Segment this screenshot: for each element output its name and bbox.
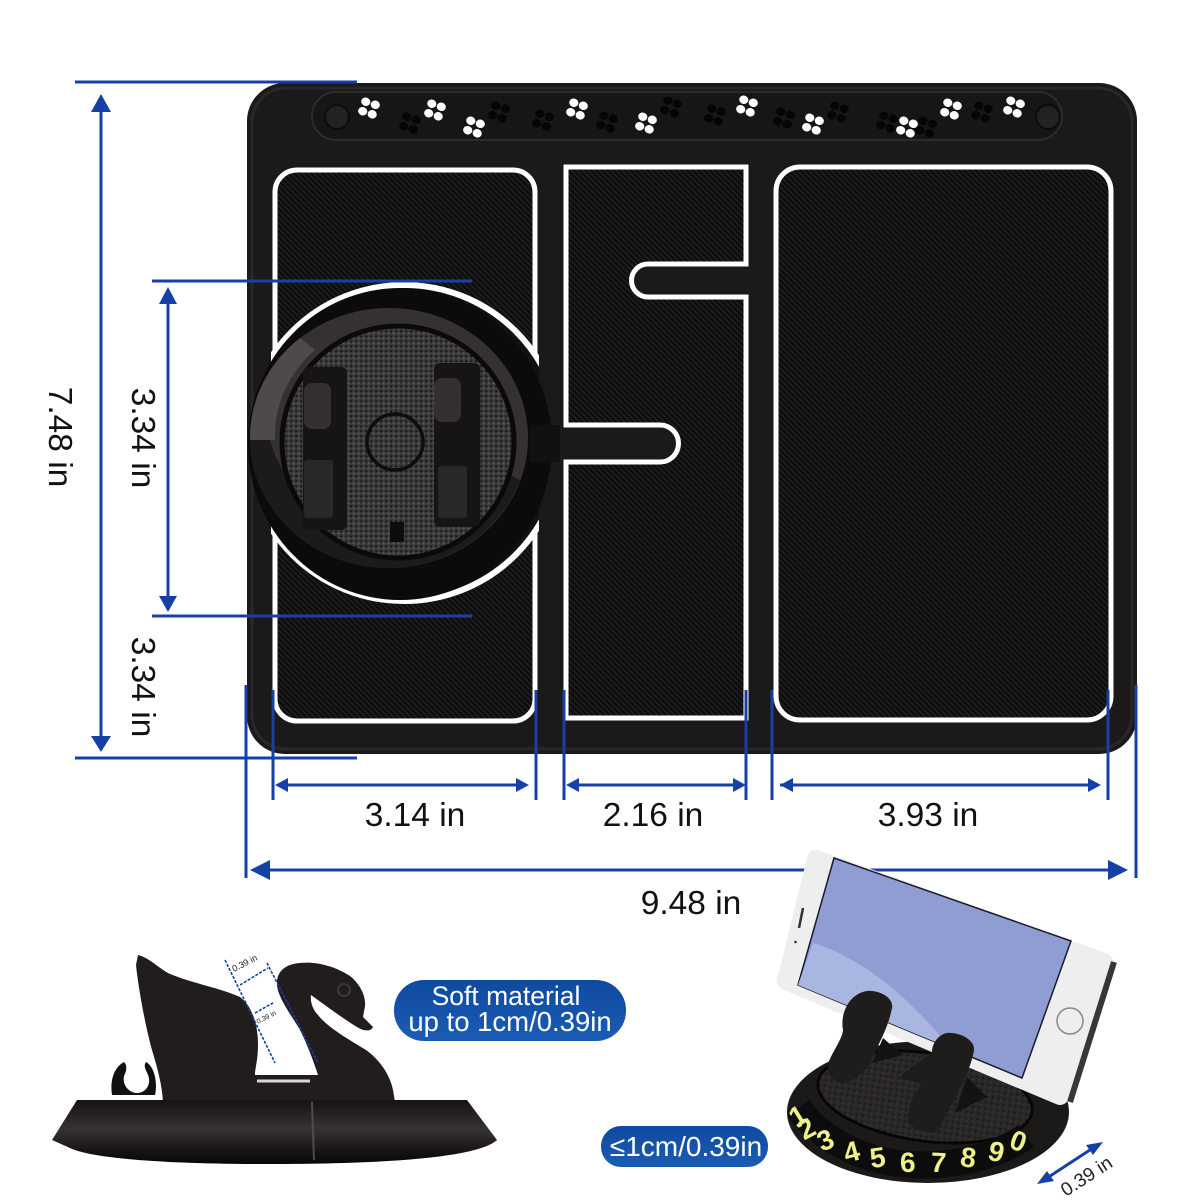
digits: 5 xyxy=(868,1141,888,1174)
callout: soft material: up to 1cm/0.39in xyxy=(408,1006,612,1037)
label: 3.93 in: 3.93 in xyxy=(878,797,978,834)
callout: soft material: Soft material xyxy=(432,981,580,1011)
number plate stand xyxy=(783,991,1031,1178)
phone edge xyxy=(1070,962,1114,1102)
digits: 1 xyxy=(783,1099,813,1133)
dimension marks on swan xyxy=(225,960,318,1063)
digits: 0 xyxy=(1006,1124,1031,1158)
arrow: height 3.34 in xyxy=(159,287,177,612)
arrow: width 2.16 in xyxy=(566,778,746,792)
arrow: height 7.48 in xyxy=(91,94,111,752)
mat: non-slip dashboard pad xyxy=(246,83,1137,754)
phone holder seen from above xyxy=(248,288,560,600)
gap highlight xyxy=(257,1080,310,1082)
arrow: width 3.14 in xyxy=(275,778,529,792)
base seam xyxy=(312,1102,314,1160)
swan phone holder side view xyxy=(52,953,497,1164)
logo mark xyxy=(390,522,404,542)
digits: 3 xyxy=(812,1123,838,1157)
speaker xyxy=(795,908,803,943)
arrow: width 3.93 in xyxy=(780,778,1101,792)
digits xyxy=(783,1099,1031,1178)
label: 3.14 in: 3.14 in xyxy=(365,797,465,834)
left support xyxy=(872,1038,903,1063)
callout: 1cm limit xyxy=(601,1126,768,1167)
centre button xyxy=(367,414,423,470)
number strip with flowers xyxy=(312,92,1062,140)
digits: 2 xyxy=(792,1111,821,1146)
dimension lines xyxy=(75,82,1136,880)
phone on holder xyxy=(786,858,1114,1102)
digits: 6 xyxy=(899,1147,916,1178)
left arm xyxy=(303,367,347,530)
digits: 4 xyxy=(840,1135,863,1169)
stand base disc xyxy=(787,1038,1069,1183)
callout: 1cm limit: ≤1cm/0.39in xyxy=(610,1131,762,1162)
arrow: width 9.48 in xyxy=(250,860,1128,880)
home button xyxy=(1057,1008,1083,1034)
wing xyxy=(136,955,258,1102)
left arm xyxy=(828,991,892,1083)
clip xyxy=(111,1062,156,1095)
digits: 9 xyxy=(985,1135,1008,1169)
phone body xyxy=(786,859,1104,1096)
right support xyxy=(955,1077,987,1113)
label: 9.48 in: 9.48 in xyxy=(641,885,741,922)
callout: soft material xyxy=(394,980,626,1041)
swan eye xyxy=(338,984,350,996)
digits: 8 xyxy=(958,1141,978,1174)
arrow: 0.39 in thickness xyxy=(1037,1142,1103,1184)
screen glare xyxy=(798,943,950,1048)
right arm xyxy=(434,363,480,527)
right compartment xyxy=(776,167,1111,720)
base xyxy=(52,1100,497,1164)
small label 2: 0.39 in xyxy=(256,1010,278,1026)
screen xyxy=(798,858,1071,1078)
neck and head xyxy=(250,963,395,1102)
left compartment xyxy=(275,170,535,721)
right arm xyxy=(900,1033,974,1132)
small label: 0.39 in xyxy=(230,953,259,974)
digits: 7 xyxy=(930,1147,947,1178)
circular cutout xyxy=(271,282,539,604)
number strip band xyxy=(798,1108,1026,1165)
label: 3.34 in upper: 3.34 in xyxy=(124,388,161,488)
label: 7.48 in: 7.48 in xyxy=(41,387,78,487)
label: 3.34 in lower: 3.34 in xyxy=(124,637,161,737)
label: 2.16 in: 2.16 in xyxy=(603,797,703,834)
middle compartment xyxy=(566,167,746,718)
label: 0.39 in diagonal: 0.39 in xyxy=(1057,1153,1117,1200)
